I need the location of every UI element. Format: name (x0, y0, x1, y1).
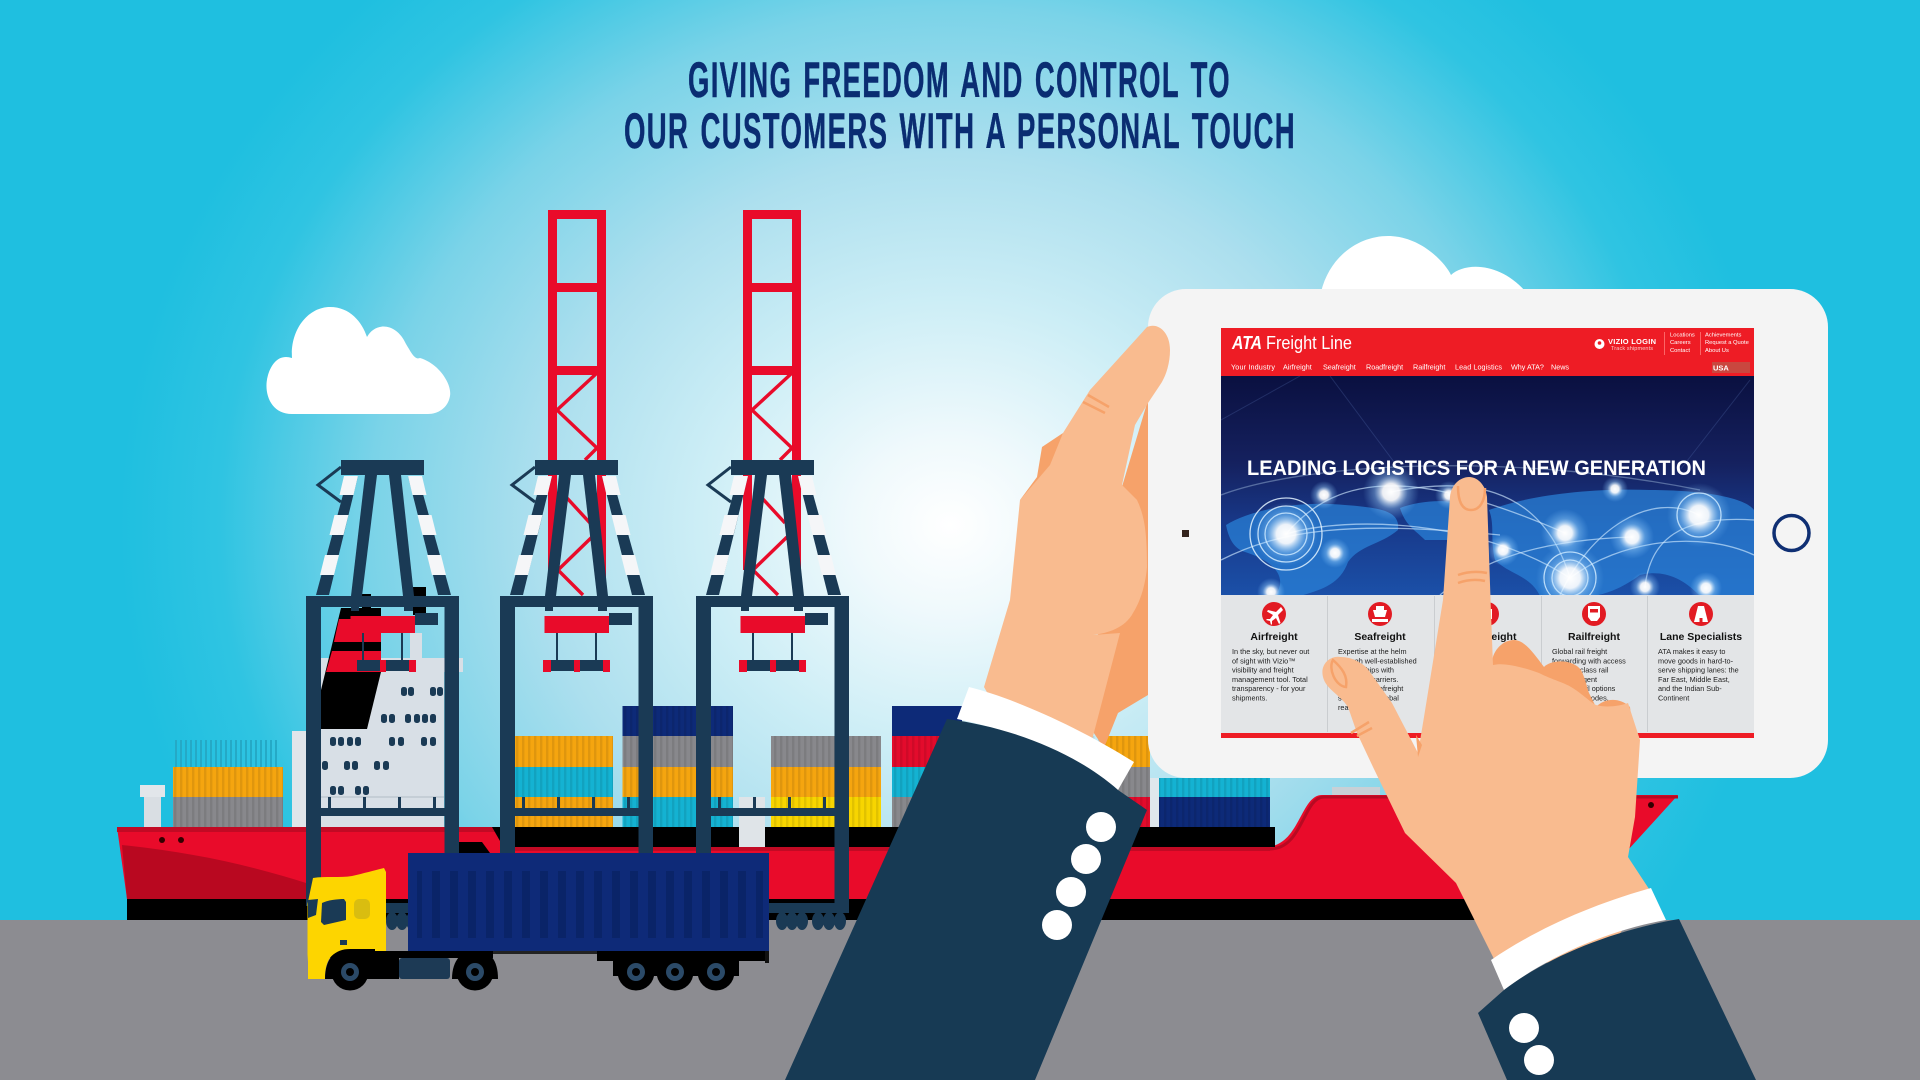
network nodes (1257, 466, 1728, 595)
card: seafreight: solutions for global (1338, 694, 1399, 702)
superstructure (292, 587, 463, 827)
left hand skin (984, 326, 1170, 740)
card: seafreight: Intelligent seafreight (1338, 684, 1403, 693)
world map (1226, 490, 1754, 596)
hull (117, 795, 1678, 920)
tablet body (1148, 289, 1828, 778)
card: lane specialists: Lane Specialists (1660, 631, 1742, 643)
card: lane specialists: and the Indian Sub- (1658, 684, 1722, 693)
website header: Your Industry (1231, 362, 1275, 372)
website header: Track shipments (1611, 346, 1653, 352)
website header: About Us (1705, 348, 1729, 354)
container stack: rear left (173, 740, 283, 827)
website header: ATA (1231, 333, 1262, 353)
card: seafreight: reach. (1338, 703, 1358, 712)
container stack: centre (515, 736, 613, 827)
chassis (330, 950, 769, 979)
title (624, 52, 1296, 159)
card: railfreight: across all modes. (1552, 694, 1609, 702)
funnel (321, 608, 381, 729)
website header: Roadfreight (1366, 362, 1403, 372)
website header: VIZIO LOGIN (1608, 337, 1656, 346)
title: GIVING FREEDOM AND CONTROL TO (688, 52, 1231, 108)
card: seafreight: relationships with (1338, 666, 1394, 674)
card: lane specialists (1658, 602, 1742, 702)
container stack: forward (1150, 778, 1380, 827)
container ship (117, 587, 1678, 920)
card: seafreight (1338, 602, 1417, 712)
website service cards (1221, 595, 1754, 738)
right sleeve buttons (1509, 1013, 1554, 1075)
website header: Lead Logistics (1455, 362, 1502, 372)
website header: Seafreight (1323, 362, 1356, 372)
left cuff (957, 687, 1134, 790)
crane towers (red lattice) (548, 210, 801, 595)
curled fingers (1490, 640, 1632, 725)
card: airfreight: In the sky, but never out (1232, 647, 1309, 656)
website header: News (1551, 362, 1569, 372)
website header: Request a Quote (1705, 340, 1749, 346)
cloud left (266, 307, 450, 414)
truck (308, 853, 769, 990)
card: railfreight: Railfreight (1568, 631, 1620, 643)
left hand (785, 326, 1170, 1080)
card: railfreight: forwarding with access (1552, 656, 1626, 666)
card: airfreight: of sight with Vizio™ (1232, 656, 1296, 666)
card: airfreight: visibility and freight (1232, 666, 1294, 674)
card: lane specialists: move goods in hard-to- (1658, 656, 1734, 666)
card: airfreight: management tool. Total (1232, 675, 1308, 684)
card: seafreight: Expertise at the helm (1338, 647, 1407, 656)
website header: Freight Line (1266, 333, 1352, 353)
website header: USA (1713, 364, 1729, 372)
container stack: right of centre (771, 736, 881, 827)
card: railfreight: Global rail freight (1552, 647, 1607, 656)
title: OUR CUSTOMERS WITH A PERSONAL TOUCH (624, 103, 1296, 159)
home button (1774, 516, 1809, 550)
card: airfreight: transparency - for your (1232, 684, 1306, 693)
camera (1182, 530, 1189, 537)
left hand shadow (1020, 400, 1148, 748)
card: lane specialists: ATA makes it easy to (1658, 647, 1725, 656)
index knuckle lines (1458, 572, 1487, 583)
sleeve buttons (1042, 812, 1116, 940)
thumb knuckle lines (1351, 722, 1372, 736)
route arcs (1221, 466, 1754, 595)
card: railfreight: blend of rail options (1552, 684, 1616, 693)
crane centre (500, 460, 653, 930)
ground (0, 920, 1920, 1080)
card: roadfreight (1458, 602, 1517, 643)
card: lane specialists: Continent (1658, 694, 1689, 702)
card: roadfreight: Roadfreight (1458, 631, 1517, 643)
card: airfreight: shipments. (1232, 694, 1267, 702)
container stack: centre tall (622, 706, 733, 827)
thumb nail (1331, 660, 1346, 687)
right sleeve (1478, 919, 1756, 1080)
card: lane specialists: Far East, Middle East, (1658, 675, 1730, 684)
hand skin (1322, 477, 1651, 965)
network rings (1250, 493, 1721, 604)
website header: Why ATA? (1511, 362, 1544, 372)
right hand (1322, 477, 1756, 1080)
website header: Contact (1670, 348, 1690, 354)
card: seafreight: through well-established (1338, 656, 1417, 666)
website header (1221, 328, 1754, 376)
card: airfreight: Airfreight (1250, 631, 1298, 643)
website header: Airfreight (1283, 362, 1312, 372)
left sleeve (785, 719, 1147, 1080)
thumb creases (1083, 395, 1109, 413)
card: railfreight (1552, 602, 1626, 702)
wheels (332, 954, 734, 990)
card: railfreight: and intelligent (1552, 675, 1597, 684)
trailer container (408, 853, 769, 951)
website header: Locations (1670, 332, 1695, 338)
cloud behind tablet (1321, 236, 1526, 292)
website header: Railfreight (1413, 362, 1445, 372)
tablet (1148, 289, 1828, 778)
finger crotch shadow (1416, 735, 1422, 757)
website header: Achievements (1705, 332, 1742, 338)
right cuff (1491, 888, 1666, 990)
mast (140, 785, 165, 827)
hero headline: LEADING LOGISTICS FOR A NEW GENERATION (1247, 457, 1706, 480)
container stack: behind sleeve (892, 706, 1150, 827)
index fingernail (1458, 486, 1485, 510)
website header: Careers (1670, 340, 1691, 346)
card: airfreight (1232, 602, 1309, 702)
website hero (1221, 376, 1754, 612)
card: seafreight: top ocean carriers. (1338, 675, 1398, 684)
card: seafreight: Seafreight (1354, 631, 1406, 643)
crane left (306, 460, 459, 930)
card: lane specialists: serve shipping lanes: the (1658, 666, 1739, 674)
crane right (696, 460, 849, 930)
cab (308, 868, 386, 979)
card: railfreight: to world-class rail (1552, 666, 1609, 674)
